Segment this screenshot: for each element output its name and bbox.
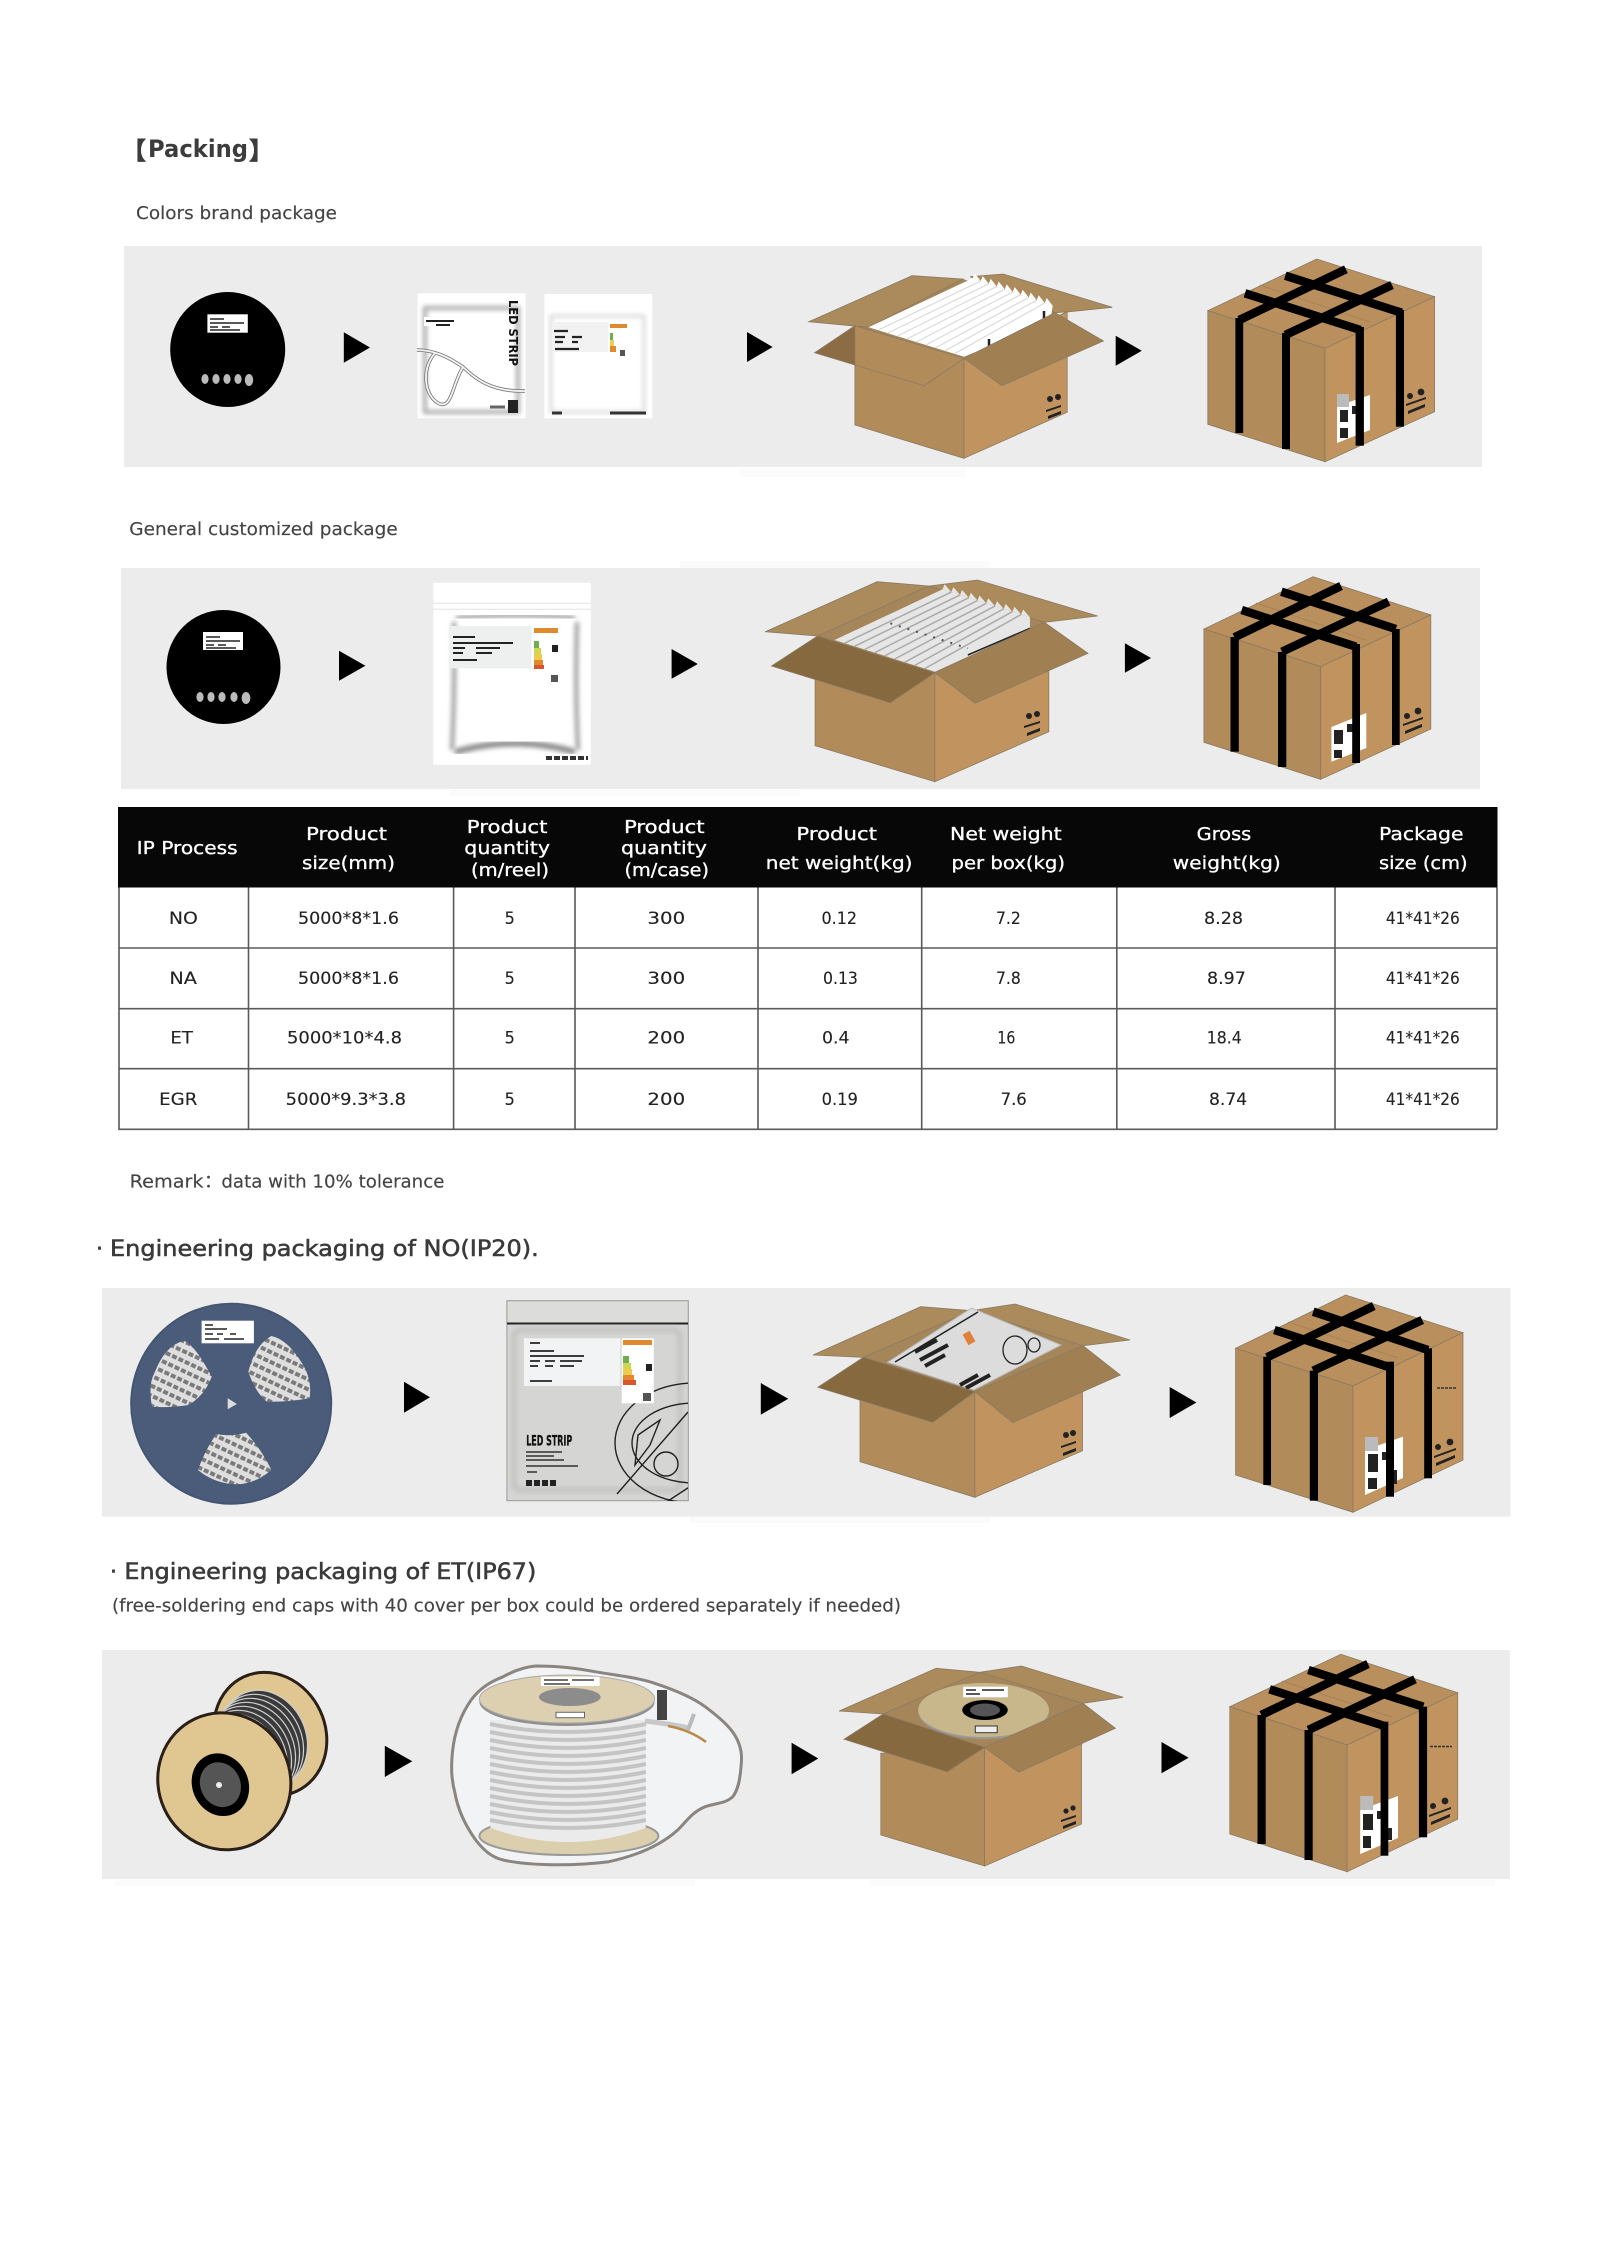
table row: NA: 41*41*26 <box>1386 969 1460 989</box>
arrow <box>344 332 370 363</box>
icon: open box with grey bags <box>765 580 1098 782</box>
remark: data with 10% tolerance <box>221 1172 444 1193</box>
table header labels <box>137 818 1468 881</box>
table row: NA: NA <box>169 969 197 989</box>
arrow <box>404 1382 430 1413</box>
table row: ET <box>170 1029 1460 1049</box>
table header labels: Product <box>467 818 548 838</box>
table row: ET: 5 <box>505 1029 515 1049</box>
table header labels: quantity <box>621 839 707 859</box>
title: Packing <box>148 135 248 163</box>
table row: NO: NO <box>169 909 198 929</box>
table row: ET: 5000*10*4.8 <box>287 1029 402 1049</box>
table row: ET: 0.4 <box>822 1029 850 1049</box>
table row: ET: 41*41*26 <box>1386 1029 1460 1049</box>
table row: NA: 5000*8*1.6 <box>298 969 399 989</box>
icon: grey printed bag: LED STRIP <box>526 1433 572 1449</box>
table row: ET: ET <box>170 1029 194 1049</box>
table row: EGR: 5000*9.3*3.8 <box>286 1090 406 1110</box>
title: 【 <box>122 131 146 166</box>
table row: NA <box>169 969 1460 989</box>
table row: EGR: 8.74 <box>1209 1090 1247 1110</box>
table header labels: net weight(kg) <box>766 854 912 874</box>
arrow <box>1162 1742 1189 1773</box>
table row: EGR: 41*41*26 <box>1386 1090 1460 1110</box>
remark <box>130 1168 444 1194</box>
table row: NO <box>169 909 1460 929</box>
heading: engineering packaging ET: Engineering packaging of ET(IP67) <box>124 1560 536 1585</box>
title: 】 <box>249 131 273 166</box>
icon: blue reel <box>131 1304 331 1504</box>
table header labels: Product <box>796 825 877 845</box>
table row: NA: 8.97 <box>1207 969 1246 989</box>
icon: bag back <box>544 294 652 418</box>
table header labels: size(mm) <box>302 854 395 874</box>
icon: open box with white bags <box>809 273 1112 458</box>
caption: end caps note: (free-soldering end caps with 40 cover per box could be ordered separately if needed) <box>112 1596 901 1617</box>
table header labels: per box(kg) <box>952 854 1065 874</box>
icon: customized bag <box>433 583 591 765</box>
table row: NO: 41*41*26 <box>1386 909 1460 929</box>
table row: EGR: 7.6 <box>1001 1090 1027 1110</box>
table row: NO: 0.12 <box>822 909 857 929</box>
table row: NA: 7.8 <box>996 969 1021 989</box>
panel: colors brand package <box>124 246 1482 467</box>
arrow <box>672 649 698 679</box>
arrow <box>761 1383 788 1415</box>
icon: black reel <box>170 292 285 407</box>
heading: engineering packaging NO: · <box>96 1237 103 1262</box>
arrow <box>1116 336 1142 366</box>
remark: ： <box>204 1168 222 1194</box>
table row: ET: 18.4 <box>1207 1029 1242 1049</box>
table row: ET: 16 <box>997 1029 1015 1049</box>
table row: NA: 5 <box>505 969 515 989</box>
table row: EGR: 200 <box>647 1090 685 1110</box>
table header labels: Net weight <box>950 825 1062 845</box>
table row: EGR: 0.19 <box>822 1090 858 1110</box>
heading: general customized package: General customized package <box>129 519 398 540</box>
remark: Remark <box>130 1172 204 1193</box>
arrow <box>1170 1387 1196 1418</box>
table header labels: Package <box>1379 825 1464 845</box>
table header background <box>118 807 1498 888</box>
icon: black reel <box>166 610 280 724</box>
arrow <box>1125 643 1151 673</box>
arrow <box>385 1746 412 1777</box>
panel: engineering packaging ET <box>102 1650 1510 1879</box>
panel: engineering packaging NO <box>102 1288 1510 1517</box>
icon: strapped box <box>1230 1654 1458 1872</box>
table header labels: Gross <box>1197 825 1251 845</box>
icon: reel in plastic bag <box>452 1666 742 1865</box>
table row: EGR: EGR <box>159 1090 198 1110</box>
table row: EGR <box>159 1090 1460 1110</box>
table row: EGR: 5 <box>505 1090 515 1110</box>
arrow <box>747 332 773 362</box>
arrow <box>792 1743 818 1774</box>
table header labels: weight(kg) <box>1173 854 1281 874</box>
table header labels: quantity <box>464 839 550 859</box>
icon: wound reel <box>135 1654 347 1872</box>
icon: strapped box <box>1204 577 1431 779</box>
icon: open box with printed bag <box>813 1304 1130 1497</box>
heading: engineering packaging ET: · <box>110 1560 117 1585</box>
table row: ET: 200 <box>647 1029 685 1049</box>
table header labels: size (cm) <box>1379 854 1468 874</box>
table row: NO: 7.2 <box>996 909 1021 929</box>
icon: bag front: LED STRIP <box>506 300 520 366</box>
table row: NA: 0.13 <box>823 969 858 989</box>
table header labels: (m/reel) <box>471 861 549 881</box>
icon: strapped box <box>1236 1295 1463 1512</box>
table row: NO: 5000*8*1.6 <box>298 909 399 929</box>
table row: NO: 300 <box>647 909 685 929</box>
table header labels: Product <box>624 818 705 838</box>
table row: NA: 300 <box>647 969 685 989</box>
icon: grey printed bag <box>506 1300 689 1502</box>
heading: colors brand package: Colors brand package <box>136 203 337 224</box>
icon: bag front <box>417 293 526 418</box>
heading: engineering packaging NO: Engineering packaging of NO(IP20). <box>110 1237 539 1262</box>
arrow <box>339 651 365 681</box>
table header labels: IP Process <box>137 839 238 859</box>
table header labels: Product <box>306 825 387 845</box>
table header labels: (m/case) <box>624 861 709 881</box>
icon: open box with reel <box>839 1666 1123 1866</box>
title <box>122 131 273 166</box>
panel: general customized package <box>121 568 1480 789</box>
icon: strapped box <box>1208 259 1435 462</box>
table row: NO: 8.28 <box>1204 909 1243 929</box>
table <box>118 807 1498 1129</box>
table row: NO: 5 <box>505 909 515 929</box>
